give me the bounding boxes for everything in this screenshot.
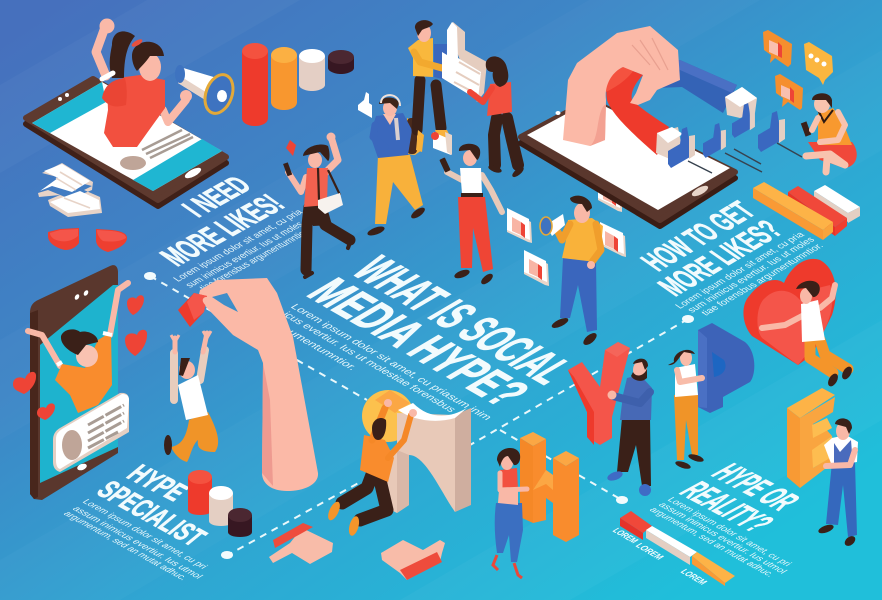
isometric bars xyxy=(753,182,860,240)
icon: megaphone xyxy=(175,65,238,117)
woman with curly hair xyxy=(493,448,527,578)
heading: I need more likes: I NEED xyxy=(174,171,259,222)
progress bar with labels: LOREM xyxy=(609,527,640,545)
woman walking with bag and phone xyxy=(283,132,351,277)
progress bar with labels: LOREM xyxy=(677,568,709,587)
text block: need more likes body: tiae forensbus argumentumntior xyxy=(197,228,312,293)
icon: red hearts pair xyxy=(48,228,127,252)
icon: thumb cards xyxy=(507,176,626,286)
phone with magnet and hand xyxy=(521,26,802,226)
jumping person xyxy=(164,331,218,462)
text block: hype or reality body: assum inimicus evertiur. Ius utmol xyxy=(655,501,789,576)
text block: hype specialist body: assum inimicus evertiur. Ius utmol xyxy=(69,505,205,580)
heading: how to get more likes xyxy=(633,196,791,302)
text block: how to get likes body: sum inimicus evertiur. Ius ut moles xyxy=(685,236,817,315)
text block: hype specialist body: Lorem ipsum dolor sit amet, cu pri xyxy=(79,498,209,571)
letter E with man xyxy=(787,388,858,548)
heading: how to get more likes: MORE LIKES? xyxy=(650,215,791,302)
man with beard xyxy=(606,359,652,496)
man with megaphone xyxy=(540,196,603,347)
tablet with woman xyxy=(28,265,129,500)
heading: hype or reality: REALITY? xyxy=(670,477,782,537)
icon: white thumbs down hands xyxy=(38,163,102,217)
man climbing N xyxy=(326,399,417,537)
heading: how to get more likes: HOW TO GET xyxy=(633,196,764,277)
text block: title body: icus evertiur. Ius ut molestiae forensbus xyxy=(279,310,459,414)
letter N with man climbing xyxy=(326,390,471,537)
man with headphones and backpack xyxy=(358,92,427,237)
heading: hype specialist xyxy=(90,459,214,551)
heading: hype specialist: SPECIALIST xyxy=(90,475,214,551)
text block: how to get likes body: Lorem ipsum dolor sit amet, cu pria xyxy=(673,230,808,311)
man and woman with big like xyxy=(408,20,525,179)
letter P with woman xyxy=(668,323,754,470)
progress bar with labels: LOREM xyxy=(632,542,666,562)
hand gripping magnet xyxy=(563,26,680,146)
big red heart with woman xyxy=(743,259,854,388)
phone with woman and megaphone xyxy=(26,18,238,206)
woman hugging heart xyxy=(762,281,854,388)
title: what is social media hype: MEDIA HYPE? xyxy=(295,271,542,414)
text block: title body: umentumntior. xyxy=(284,328,360,372)
big hand with held heart xyxy=(178,278,318,491)
text block: need more likes body: Lorem ipsum dolor sit amet, cu pria xyxy=(171,208,306,284)
icon: big thumbs up xyxy=(442,22,487,102)
woman in white tank and red trousers xyxy=(439,144,502,286)
small cylinders xyxy=(188,470,252,537)
heading: hype or reality xyxy=(670,459,808,537)
icon: small red and white card near man xyxy=(431,132,452,155)
icon: hand with red cuff left xyxy=(269,523,333,564)
bar cylinders top xyxy=(242,43,354,126)
text block: title body: Lorem ipsum dolor sit amet, cu priasum inim xyxy=(287,302,494,422)
text block: how to get likes body: tiae forensbus argumentumntior. xyxy=(699,242,826,318)
letter Y with bearded man xyxy=(568,342,652,496)
heading: I need more likes xyxy=(152,171,293,272)
magnet xyxy=(606,60,757,160)
icon: hand with red cuff right xyxy=(381,540,445,580)
man in blue overalls xyxy=(817,418,858,548)
woman sitting with phone xyxy=(801,93,857,172)
text block: hype or reality body: Lorem ipsum dolor sit amet, cu pri xyxy=(664,496,794,568)
heading: hype specialist: HYPE xyxy=(120,459,196,506)
text block: need more likes body: sum inimicus evertiur. Ius ut moles xyxy=(183,220,306,290)
title: what is social media hype xyxy=(295,249,586,414)
text block: hype or reality body: argumentum, sed an mutat adhuc. xyxy=(646,506,776,579)
icons: red hearts around tablet xyxy=(13,295,147,420)
title: what is social media hype: WHAT IS SOCIAL xyxy=(340,249,586,392)
progress bar with labels xyxy=(609,511,735,587)
woman in orange xyxy=(28,283,128,413)
icons: speech bubbles xyxy=(763,30,833,110)
profile card xyxy=(53,393,129,472)
icon: small megaphone xyxy=(540,214,565,236)
heading: I need more likes: MORE LIKES! xyxy=(152,189,293,272)
woman shouting xyxy=(96,18,186,147)
dashed connector lines xyxy=(144,272,694,559)
text block: hype specialist body: argumentum, sed an mutat adhuc. xyxy=(60,510,190,582)
woman with ponytail xyxy=(668,350,705,470)
icons: blue thumbs attracted xyxy=(668,103,802,173)
letter H with woman xyxy=(493,432,579,578)
